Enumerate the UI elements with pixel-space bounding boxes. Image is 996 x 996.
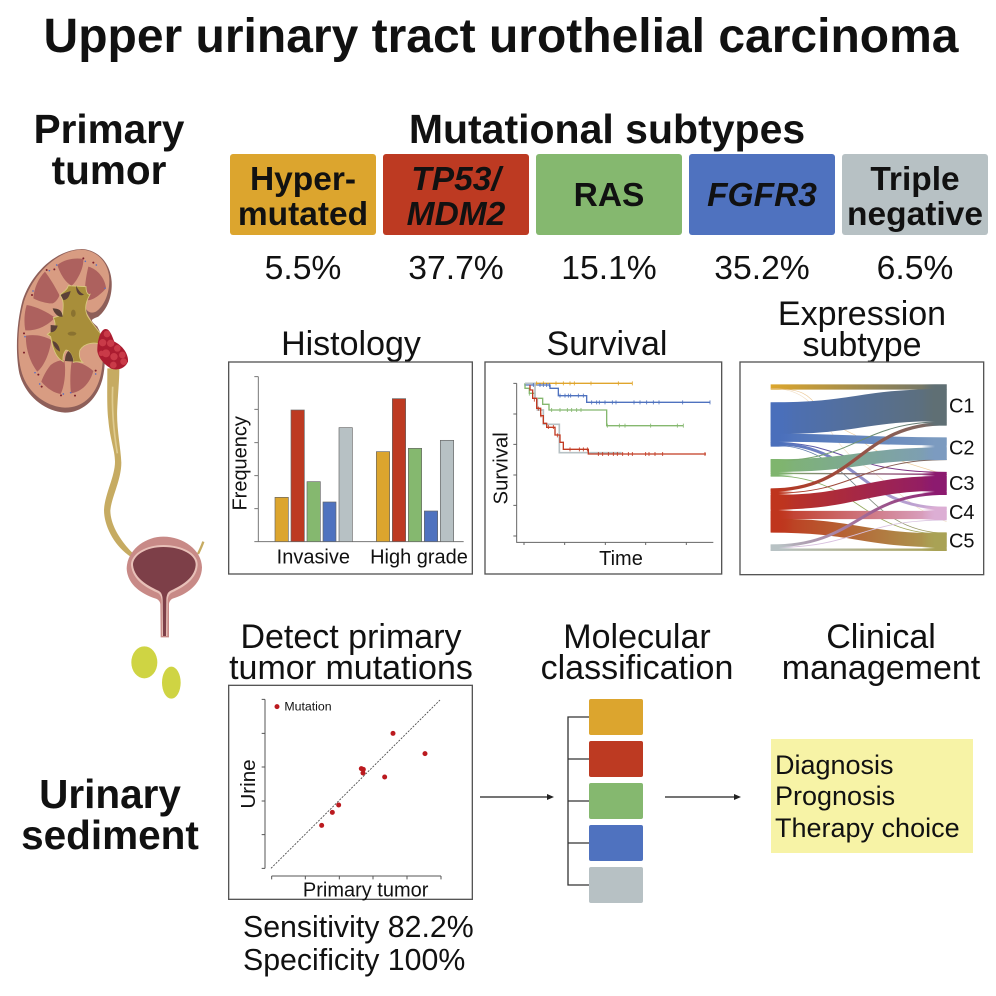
- invasive bars: [275, 410, 352, 542]
- panel: clinical management box: Prognosis: [775, 781, 895, 811]
- subtype: TP53/MDM2: 37.7%: [408, 249, 504, 287]
- sankey labels: C3: [949, 473, 975, 495]
- panel: clinical management box: Diagnosis: [775, 750, 894, 780]
- title: Upper urinary tract urothelial carcinoma: [44, 10, 959, 63]
- text: sensitivity and specificity: Specificity 100%: [243, 944, 465, 977]
- icon: kidney: [17, 249, 112, 413]
- heading: molecular classification: classification: [541, 649, 733, 687]
- subtype: RAS: RAS: [574, 177, 644, 214]
- heading: histology: Histology: [281, 325, 421, 363]
- axis labels: Time: [599, 548, 643, 570]
- sankey right nodes: [922, 384, 947, 551]
- subtype: TP53/MDM2: TP53/: [411, 161, 504, 198]
- heading: detect primary tumor mutations: tumor mutations: [229, 649, 473, 687]
- sankey left nodes: [771, 402, 793, 551]
- subtype: RAS: [536, 154, 682, 287]
- panel: histology bar chart: [229, 362, 472, 574]
- axis labels: [490, 432, 643, 570]
- survival curves: [525, 383, 710, 454]
- subtype: FGFR3: 35.2%: [714, 249, 810, 287]
- identity line: [271, 700, 440, 868]
- subtype: hyper-mutated: Hyper-: [250, 161, 356, 198]
- classes: [589, 699, 643, 903]
- kidney vessels dots: [23, 257, 97, 397]
- subtype: RAS: 15.1%: [561, 249, 657, 287]
- axis labels: Invasive: [277, 546, 350, 568]
- bracket: [568, 717, 589, 885]
- heading: expression subtype: Expression: [778, 295, 946, 333]
- heading: urinary sediment: Urinary: [39, 771, 181, 817]
- kidney pyramids: [24, 259, 106, 394]
- panel: clinical management box: [771, 739, 973, 853]
- heading: primary tumor: Primary: [34, 106, 185, 152]
- heading: survival: Survival: [547, 325, 667, 363]
- panel: molecular classification boxes: [568, 699, 643, 903]
- illustration: urinary tract anatomy: [17, 249, 203, 699]
- axis labels: [237, 759, 429, 901]
- high grade bars: [376, 399, 454, 542]
- panel: mutation scatter plot: [229, 685, 472, 901]
- chart axes: [513, 383, 713, 545]
- subtype: FGFR3: FGFR3: [707, 177, 817, 214]
- sankey labels: C1: [949, 395, 975, 417]
- chart axes: [262, 699, 441, 879]
- heading: molecular classification: Molecular: [563, 618, 711, 656]
- subtype: TP53/MDM2: MDM2: [407, 196, 506, 233]
- legend: Mutation: [284, 699, 332, 713]
- icon: urine sediment drops: [131, 646, 181, 699]
- subtype: hyper-mutated: [230, 154, 376, 287]
- sankey labels: [949, 395, 975, 553]
- icon: ureter: [104, 368, 133, 557]
- panel: expression subtype sankey: [740, 362, 984, 575]
- sankey labels: C2: [949, 437, 975, 459]
- panel: mutational subtype boxes: [230, 154, 988, 287]
- kidney pelvis: [47, 286, 105, 362]
- panel: survival chart: [485, 362, 722, 574]
- subtype: triple negative: [842, 154, 988, 287]
- subtype: triple negative: 6.5%: [877, 249, 953, 287]
- chart axes: [254, 377, 464, 542]
- sankey flows: [771, 387, 947, 550]
- axis labels: Survival: [490, 432, 512, 504]
- panel: clinical management box: Therapy choice: [775, 813, 960, 843]
- subtype: triple negative: Triple: [870, 161, 960, 198]
- heading: urinary sediment: sediment: [21, 812, 199, 858]
- axis labels: Primary tumor: [303, 879, 429, 901]
- heading: expression subtype: subtype: [802, 326, 922, 364]
- censor ticks: [529, 381, 710, 456]
- subtype: FGFR3: [689, 154, 835, 287]
- subtype: triple negative: negative: [847, 196, 983, 233]
- heading: primary tumor: tumor: [52, 147, 167, 193]
- arrow: classification to clinical management: [665, 794, 741, 800]
- icon: tumor: [97, 329, 128, 369]
- axis labels: High grade: [370, 546, 468, 568]
- mutation points: [319, 731, 427, 828]
- heading: detect primary tumor mutations: Detect primary: [240, 618, 462, 656]
- subtype: TP53/MDM2: [383, 154, 529, 287]
- text: sensitivity and specificity: Sensitivity 82.2%: [243, 911, 474, 944]
- axis labels: Urine: [237, 759, 260, 809]
- heading: clinical management: Clinical: [826, 618, 936, 656]
- axis labels: [230, 416, 468, 568]
- sankey labels: C5: [949, 531, 975, 553]
- heading: mutational subtypes: Mutational subtypes: [409, 106, 805, 152]
- icon: bladder: [120, 537, 203, 637]
- axis labels: Frequency: [230, 416, 252, 511]
- arrow: scatter to classification: [480, 794, 554, 800]
- subtype: hyper-mutated: 5.5%: [265, 249, 341, 287]
- heading: clinical management: management: [782, 649, 981, 687]
- sankey labels: C4: [949, 502, 975, 524]
- subtype: hyper-mutated: mutated: [238, 196, 368, 233]
